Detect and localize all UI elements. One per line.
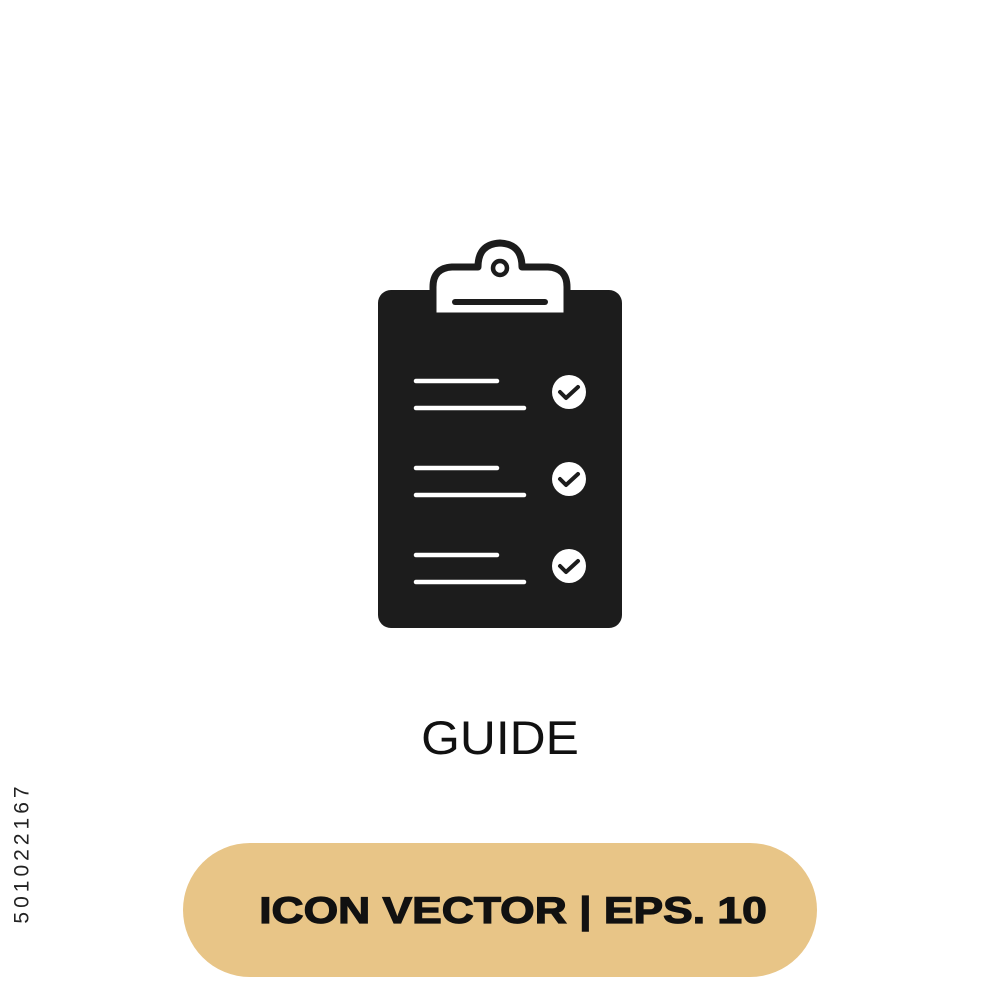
stock id vertical: 501022167 bbox=[10, 782, 34, 924]
checklist items bbox=[416, 381, 524, 582]
banner text: ICON VECTOR | EPS. 10 bbox=[259, 890, 767, 931]
title: GUIDE: GUIDE bbox=[421, 711, 579, 764]
check icons bbox=[552, 375, 586, 583]
banner pill bbox=[183, 843, 817, 977]
clipboard clip bbox=[433, 243, 567, 316]
clipboard board bbox=[378, 290, 622, 628]
